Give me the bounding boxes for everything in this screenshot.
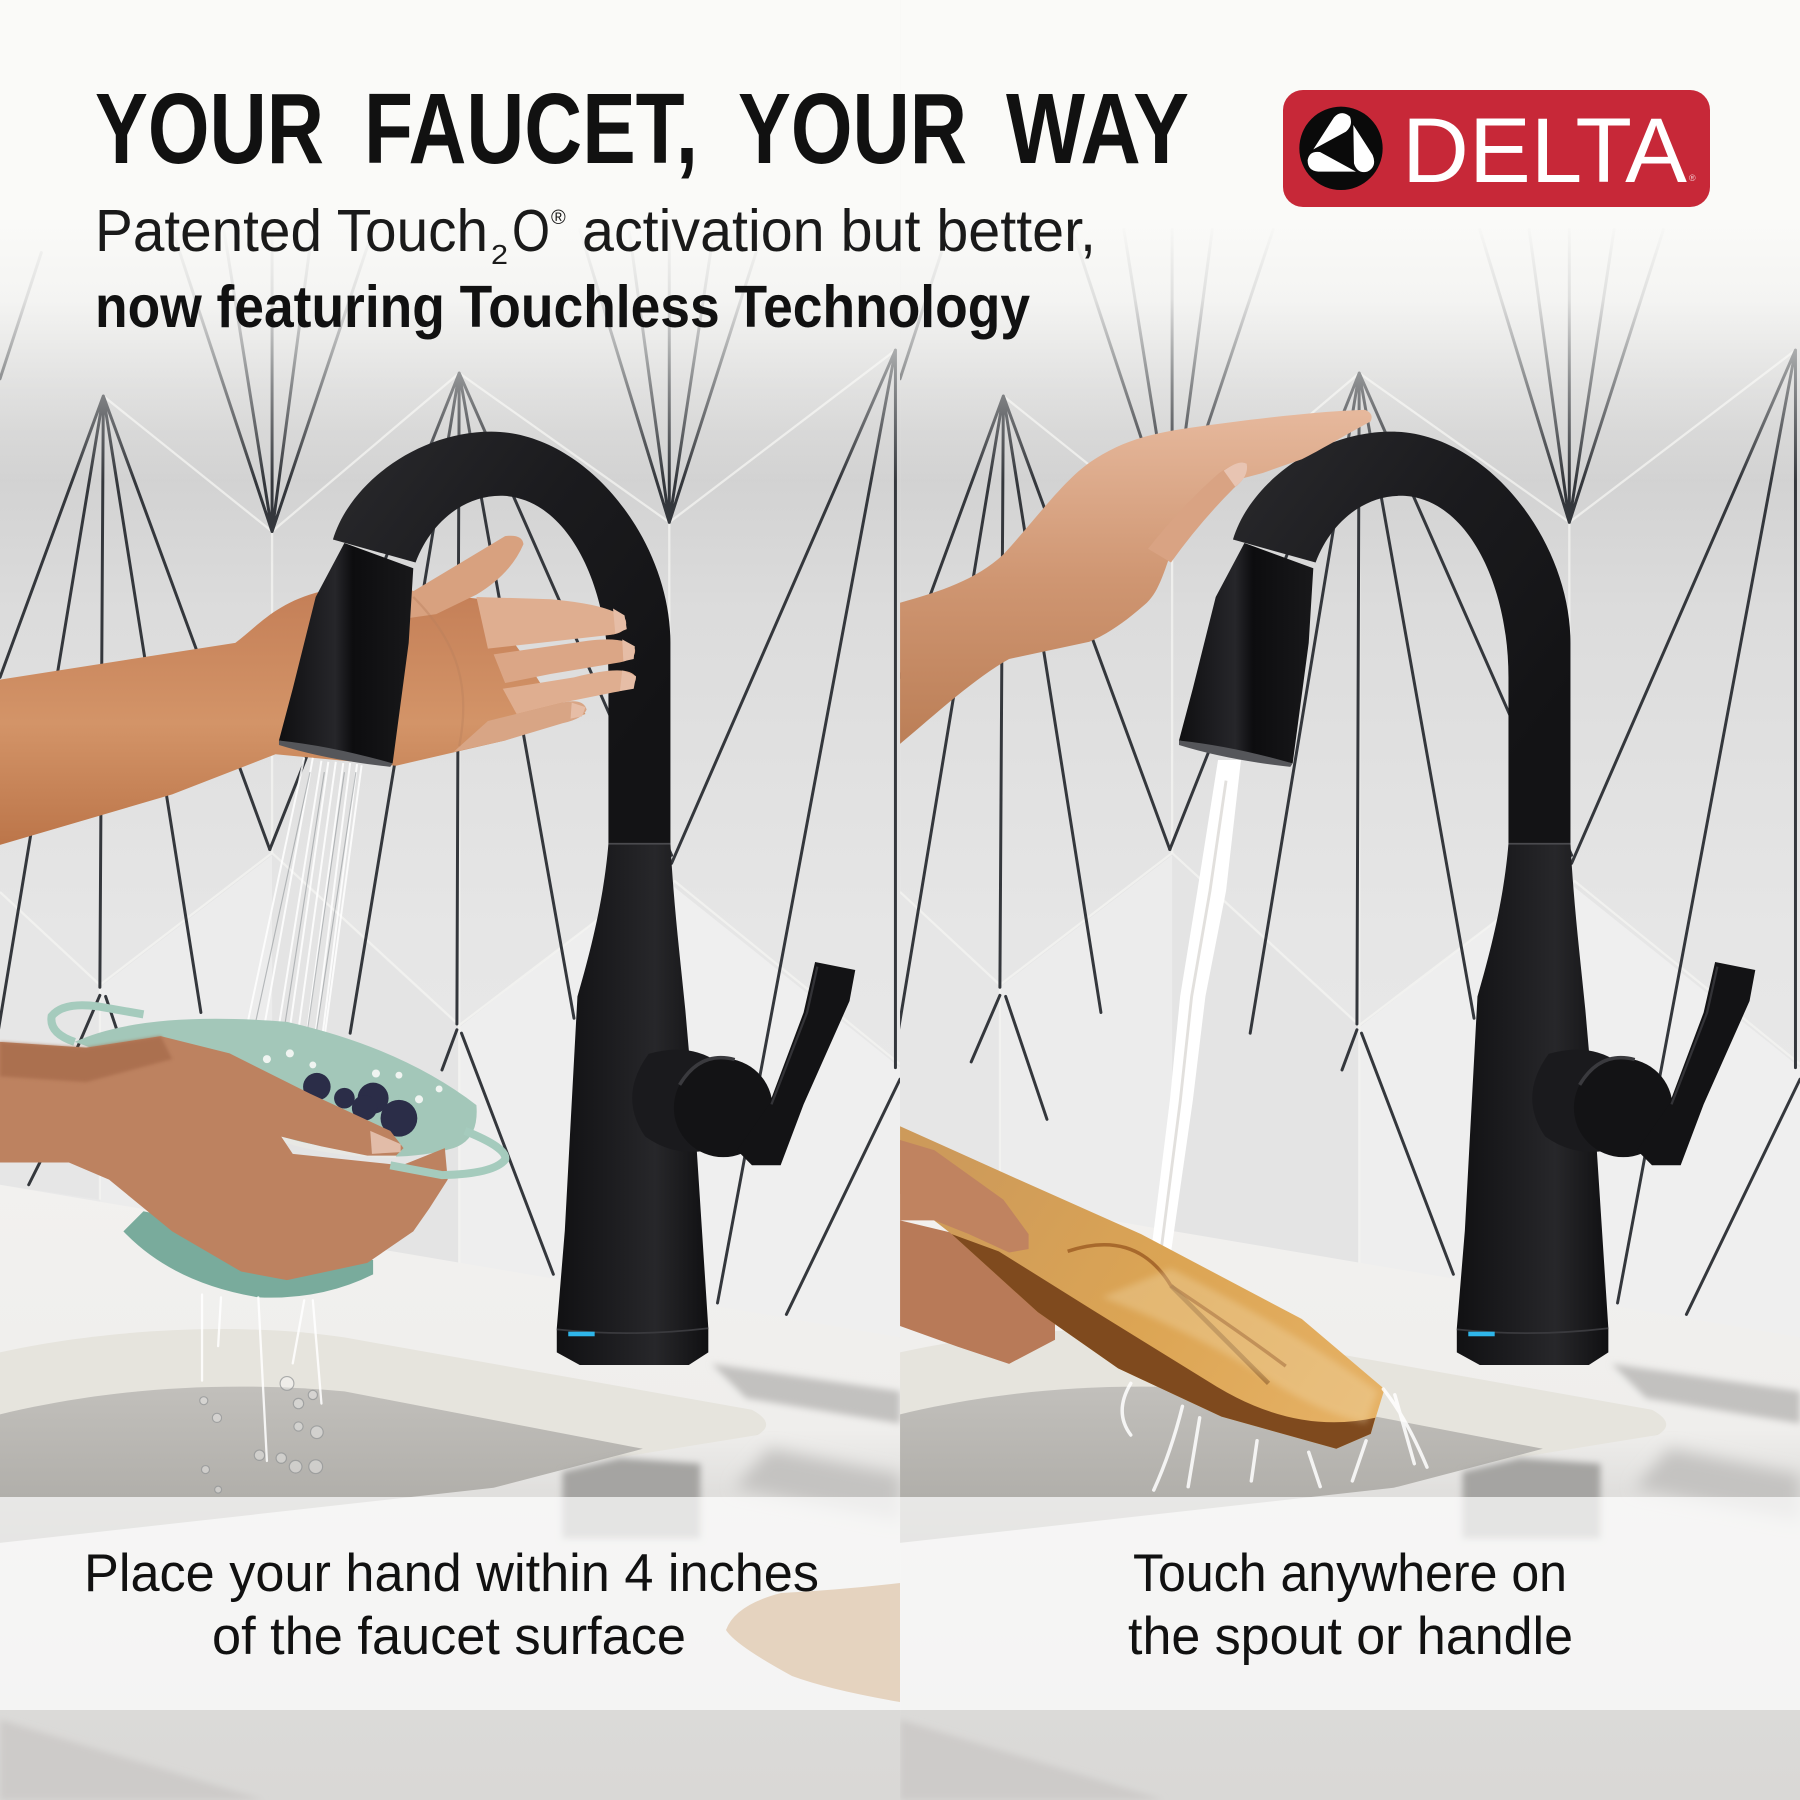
title: FAUCET, xyxy=(364,73,698,185)
Delta logo xyxy=(1283,90,1710,207)
arm and hand touching spout xyxy=(900,410,1372,744)
caption: left: Place your hand within 4 inches xyxy=(84,1544,819,1603)
thumb on cutting board xyxy=(900,1140,1029,1252)
registered mark: ® xyxy=(1689,173,1696,183)
subtitle line one: ® xyxy=(551,207,566,229)
caption band: left xyxy=(0,1497,900,1710)
subtitle line one: 2 xyxy=(491,239,508,270)
water spray xyxy=(248,758,362,1032)
wooden bowl on counter xyxy=(726,1583,900,1702)
pull-down spray head xyxy=(279,543,413,767)
hand under cutting board xyxy=(900,1220,1055,1364)
title: YOUR xyxy=(738,73,967,185)
icon: Delta emblem xyxy=(1299,107,1383,190)
water splashing off board xyxy=(1122,1383,1427,1490)
colander right handle xyxy=(390,1131,505,1175)
kitchen backdrop: patterned tile, counter and sink xyxy=(900,245,1800,1800)
caption: right: the spout or handle xyxy=(1128,1607,1573,1666)
title xyxy=(95,73,1189,185)
caption: left: of the faucet surface xyxy=(212,1607,686,1666)
wooden cutting board xyxy=(900,1126,1384,1449)
caption: right xyxy=(1128,1544,1573,1666)
hand holding colander xyxy=(0,1036,448,1280)
water stream xyxy=(1148,760,1241,1277)
caption band: right xyxy=(900,1497,1800,1710)
faucet body and spout xyxy=(333,432,855,1365)
panel: touch activation xyxy=(900,245,1800,1800)
faucet with pull-down spout xyxy=(1179,432,1755,1365)
water dripping into sink xyxy=(200,1294,323,1493)
logo wordmark: DELTA xyxy=(1402,100,1688,202)
arm and hand held under spout xyxy=(0,536,636,845)
title: YOUR xyxy=(95,73,324,185)
subtitle line one: O xyxy=(512,198,550,264)
colander with blueberries xyxy=(51,1005,477,1298)
caption: right: Touch anywhere on xyxy=(1133,1544,1567,1603)
subtitle line one xyxy=(95,198,1096,270)
panel: touchless activation xyxy=(0,245,900,1800)
kitchen backdrop: patterned tile, counter and sink xyxy=(0,245,900,1800)
subtitle line two: now featuring Touchless Technology xyxy=(95,274,1030,340)
subtitle line one: activation but better, xyxy=(582,198,1096,264)
subtitle line one: Patented Touch xyxy=(95,198,488,264)
caption: left xyxy=(84,1544,819,1666)
title: WAY xyxy=(1006,73,1189,185)
